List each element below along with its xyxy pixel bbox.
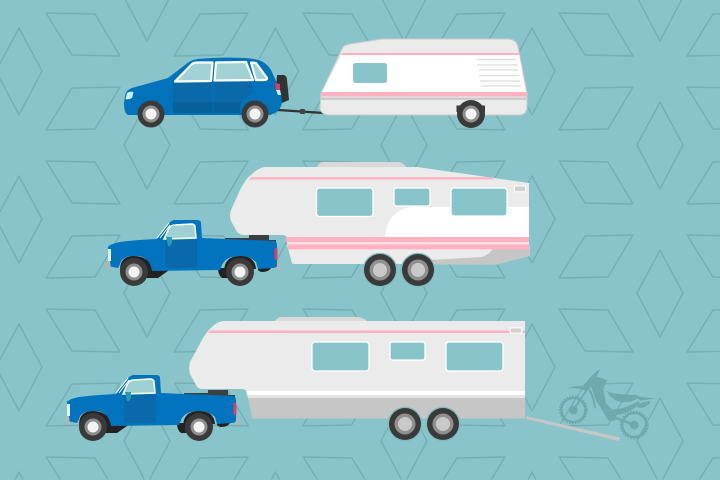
seat xyxy=(607,391,638,402)
cab window xyxy=(123,379,155,394)
skirt bands xyxy=(246,391,525,418)
headlight xyxy=(126,92,134,99)
wheel xyxy=(401,253,435,287)
front wheel xyxy=(560,396,587,424)
white panel xyxy=(385,207,529,238)
tail light xyxy=(275,83,281,95)
tail light xyxy=(234,403,236,415)
rear frame xyxy=(612,401,640,415)
number plate xyxy=(584,368,601,387)
trailer body xyxy=(320,39,527,115)
side panel xyxy=(637,401,651,408)
rear bumper xyxy=(277,263,281,270)
wheel xyxy=(363,253,397,287)
tail light xyxy=(274,248,278,260)
front bumper xyxy=(106,261,111,269)
pickup truck, bottom xyxy=(65,375,240,441)
ramp xyxy=(526,416,620,441)
trailer body xyxy=(230,167,529,237)
door xyxy=(165,240,197,268)
trailer window xyxy=(353,63,387,83)
fifth wheel trailer, bottom xyxy=(189,317,525,441)
headlight xyxy=(108,249,111,261)
windows xyxy=(316,188,507,216)
tank and frame xyxy=(591,377,617,421)
wheel arches xyxy=(79,411,215,427)
cab window xyxy=(164,224,196,239)
rear wheel xyxy=(621,411,648,439)
tow hitch xyxy=(278,109,324,114)
truck body xyxy=(67,375,236,426)
motorcycle silhouette xyxy=(560,368,655,439)
rear wheel xyxy=(226,258,254,286)
bed cover xyxy=(184,390,235,398)
pickup truck, middle xyxy=(106,220,281,286)
mirror xyxy=(166,237,172,246)
rear bumper xyxy=(236,418,240,425)
door xyxy=(124,395,156,423)
windshield xyxy=(116,378,129,393)
tail xyxy=(635,396,655,401)
wheel xyxy=(426,407,460,441)
underside shadow xyxy=(105,421,231,433)
car body xyxy=(124,58,282,115)
pink stripes xyxy=(321,53,527,96)
lower grey skirt xyxy=(287,245,530,264)
vent xyxy=(514,185,526,192)
trailer body xyxy=(189,321,525,392)
car windows xyxy=(175,62,267,82)
windshield xyxy=(157,223,170,238)
pink stripe xyxy=(208,330,525,333)
fifth wheel trailer, middle xyxy=(230,162,530,287)
vent xyxy=(510,327,522,334)
car xyxy=(124,58,289,127)
windows xyxy=(312,342,503,371)
front fender xyxy=(568,386,591,391)
front wheel xyxy=(138,100,164,128)
underside shadow xyxy=(146,266,272,278)
mirror xyxy=(125,392,131,401)
front wheel xyxy=(120,258,148,286)
wheel arches xyxy=(120,256,256,272)
headlight xyxy=(67,404,70,416)
truck body xyxy=(108,220,277,271)
rear wheel xyxy=(185,413,213,441)
roof unit xyxy=(275,317,367,321)
bed cover xyxy=(225,235,276,243)
fork xyxy=(573,386,595,410)
wheel xyxy=(388,407,422,441)
swingarm xyxy=(615,418,634,425)
trailer wheel xyxy=(456,100,485,128)
roof unit xyxy=(316,162,407,168)
lower pink stripes xyxy=(286,237,529,249)
grey stripe xyxy=(320,98,527,100)
front wheel xyxy=(79,413,107,441)
top pink stripe xyxy=(249,177,495,180)
rear wheel xyxy=(242,100,268,128)
front bumper xyxy=(65,416,70,424)
white side panel xyxy=(322,54,526,92)
camper trailer towed by car xyxy=(278,39,527,128)
vent lines xyxy=(477,60,521,86)
spare tire xyxy=(276,75,289,103)
door panels xyxy=(173,82,253,113)
